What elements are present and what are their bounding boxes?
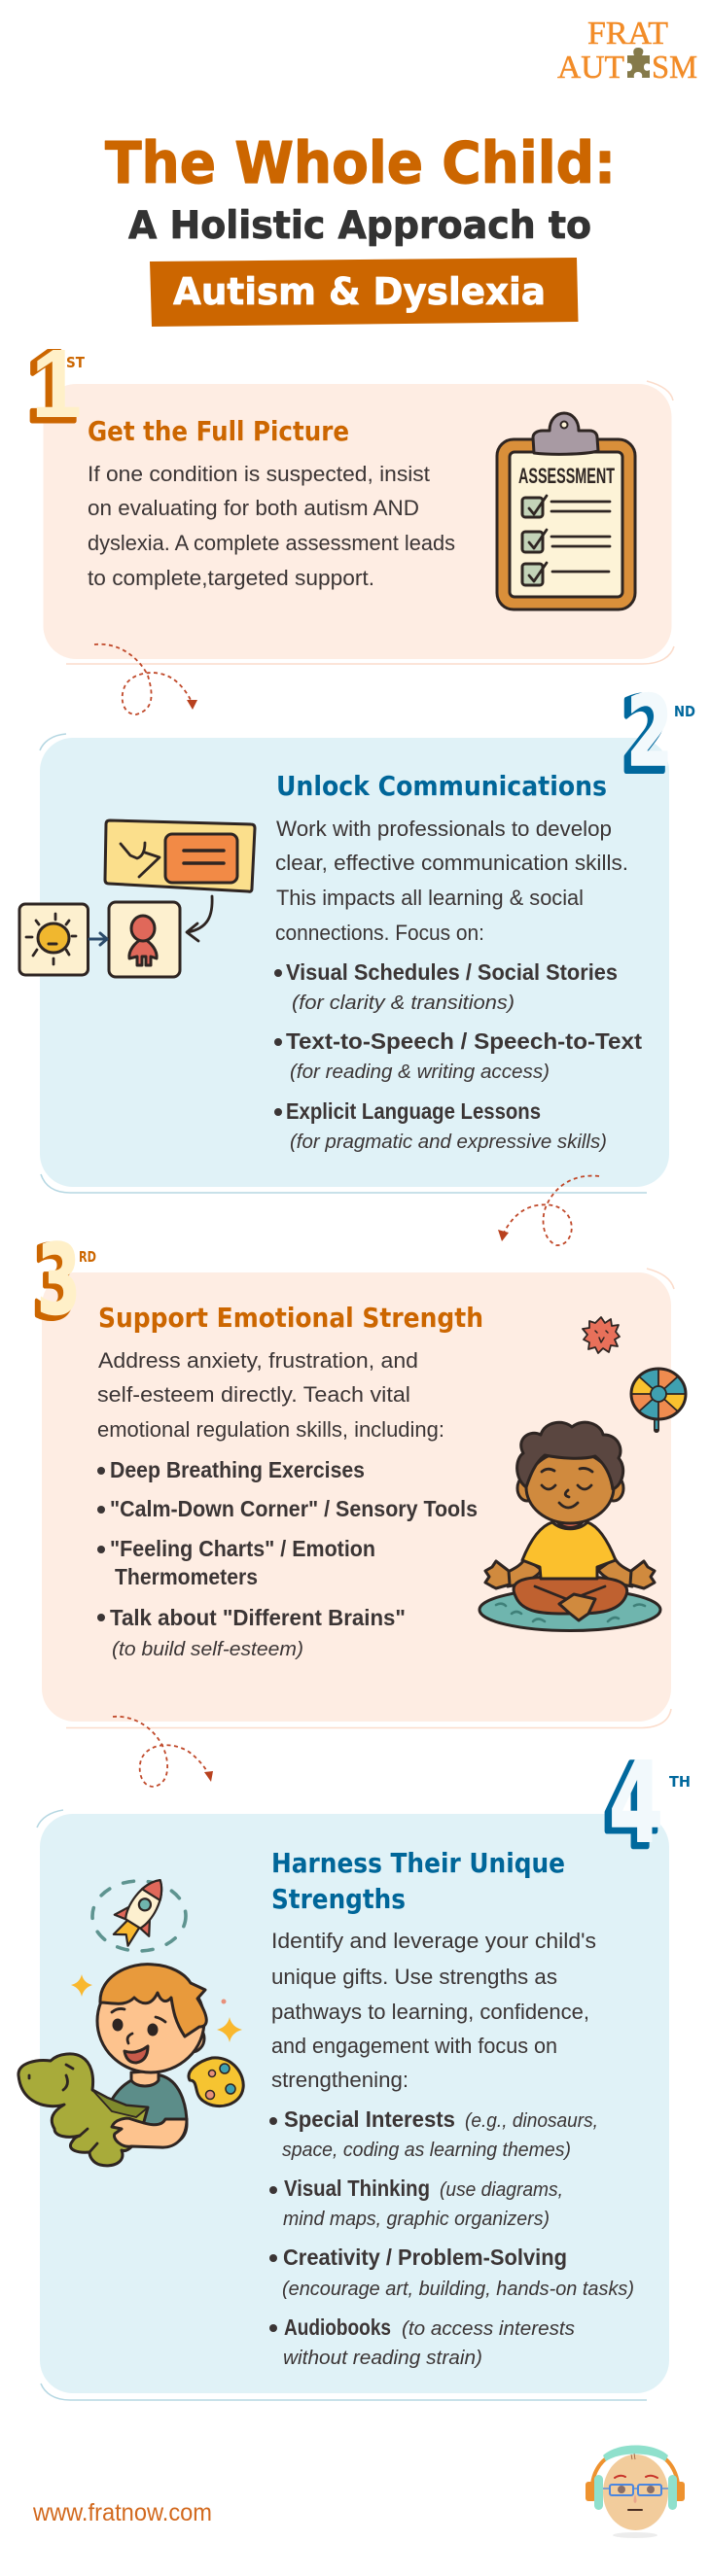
bullet list: Visual Schedules / Social Stories (286, 959, 618, 985)
body text: If one condition is suspected, insist (88, 462, 431, 486)
panel: get the full picture (26, 330, 674, 664)
bullet list: (for pragmatic and expressive skills) (290, 1131, 607, 1153)
bullet list: mind maps, graphic organizers) (283, 2208, 550, 2230)
body text: connections. Focus on: (275, 921, 484, 945)
panel: support emotional strength (32, 1223, 686, 1728)
title block: The Whole Child: (105, 129, 616, 196)
bullet list: Visual Thinking (284, 2176, 430, 2201)
bullet list (269, 2106, 634, 2369)
badge: 2nd: 2 (626, 675, 673, 788)
heading: Strengths (271, 1883, 406, 1915)
arrow: step 1 to step 2 (94, 644, 197, 714)
icon: spiky feeling face (583, 1317, 620, 1353)
body text: on evaluating for both autism AND (88, 496, 419, 520)
bullet list: (e.g., dinosaurs, (465, 2109, 598, 2132)
title block: A Holistic Approach to (128, 204, 591, 248)
icon: rocket with orbit (92, 1869, 186, 1953)
bullet list: without reading strain) (283, 2347, 482, 2369)
arrow: step 3 to step 4 (113, 1717, 213, 1787)
body text (88, 462, 455, 590)
body text: This impacts all learning & social (276, 886, 584, 910)
badge: 2nd: ND (674, 703, 695, 720)
bullet list: (encourage art, building, hands-on tasks) (282, 2278, 634, 2300)
panel: unlock communications (19, 675, 695, 1193)
bullet list: (for clarity & transitions) (292, 992, 515, 1014)
bullet list: Creativity / Problem-Solving (283, 2245, 567, 2270)
panel: harness their unique strengths (18, 1738, 691, 2400)
heading: Harness Their Unique (271, 1847, 565, 1879)
heading (271, 1847, 565, 1915)
logo: Frat Autism (557, 16, 697, 86)
body text: to complete,targeted support. (88, 566, 374, 590)
arrow: step 2 to step 3 (498, 1176, 599, 1245)
illustration: head with headphones (586, 2446, 685, 2538)
heading: Support Emotional Strength (98, 1302, 483, 1334)
icon: visual schedule cards (19, 820, 255, 977)
logo: Frat Autism: AUT (557, 50, 624, 86)
body text: pathways to learning, confidence, (271, 2000, 589, 2024)
body text: clear, effective communication skills. (275, 851, 628, 875)
bullet list: Audiobooks (284, 2315, 391, 2340)
body text (275, 817, 628, 945)
body text: dyslexia. A complete assessment leads (88, 531, 455, 555)
bullet list (97, 1457, 478, 1660)
footer website: www.fratnow.com (32, 2499, 212, 2526)
bullet list: Explicit Language Lessons (286, 1098, 541, 1124)
body text: Work with professionals to develop (276, 817, 612, 841)
title block: Autism & Dyslexia (173, 270, 546, 313)
body text (97, 1348, 444, 1442)
body text: self-esteem directly. Teach vital (97, 1382, 410, 1407)
title block (105, 129, 616, 327)
bullet list: (to build self-esteem) (112, 1638, 303, 1660)
body text: and engagement with focus on (271, 2034, 557, 2058)
badge: 4th: 4 (609, 1738, 663, 1867)
bullet list: Talk about "Different Brains" (110, 1605, 406, 1630)
badge: 4th: TH (669, 1773, 691, 1791)
body text: strengthening: (271, 2068, 408, 2092)
icon: assessment clipboard (497, 413, 635, 609)
body text: Identify and leverage your child's (271, 1929, 596, 1953)
heading: Unlock Communications (276, 770, 607, 802)
bullet list: (use diagrams, (440, 2178, 563, 2201)
badge: 2nd: 2 (621, 677, 669, 795)
badge: 4th: 4 (603, 1739, 659, 1873)
logo: Frat Autism: SM (652, 50, 697, 86)
bullet list: space, coding as learning themes) (282, 2139, 571, 2161)
body text: Address anxiety, frustration, and (98, 1348, 418, 1373)
bullet list: Deep Breathing Exercises (110, 1457, 365, 1482)
logo: Frat Autism: FRAT (587, 16, 668, 52)
badge: 1st: 1 (26, 331, 77, 443)
badge: 1st: ST (66, 354, 86, 371)
bullet list: "Feeling Charts" / Emotion (110, 1536, 375, 1561)
bullet list (274, 959, 642, 1153)
illustration: meditating child (479, 1422, 660, 1631)
body text (271, 1929, 596, 2092)
bullet list: "Calm-Down Corner" / Sensory Tools (110, 1496, 478, 1521)
body text: emotional regulation skills, including: (97, 1417, 444, 1442)
heading: Get the Full Picture (88, 415, 349, 447)
badge: 3rd: 3 (32, 1226, 77, 1341)
bullet list: Special Interests (284, 2106, 455, 2132)
body text: unique gifts. Use strengths as (271, 1965, 557, 1989)
bullet list: Text-to-Speech / Speech-to-Text (286, 1028, 642, 1054)
bullet list: (for reading & writing access) (290, 1061, 550, 1083)
illustration: smiling child with dinosaur (18, 1965, 243, 2166)
badge: 3rd: 3 (37, 1223, 81, 1337)
bullet list: Thermometers (115, 1564, 258, 1589)
bullet list: (to access interests (402, 2317, 575, 2340)
badge: 1st: 1 (31, 330, 82, 438)
icon: emotion wheel (631, 1369, 686, 1430)
icon: assessment clipboard: ASSESSMENT (518, 464, 615, 488)
badge: 3rd: RD (79, 1248, 96, 1266)
